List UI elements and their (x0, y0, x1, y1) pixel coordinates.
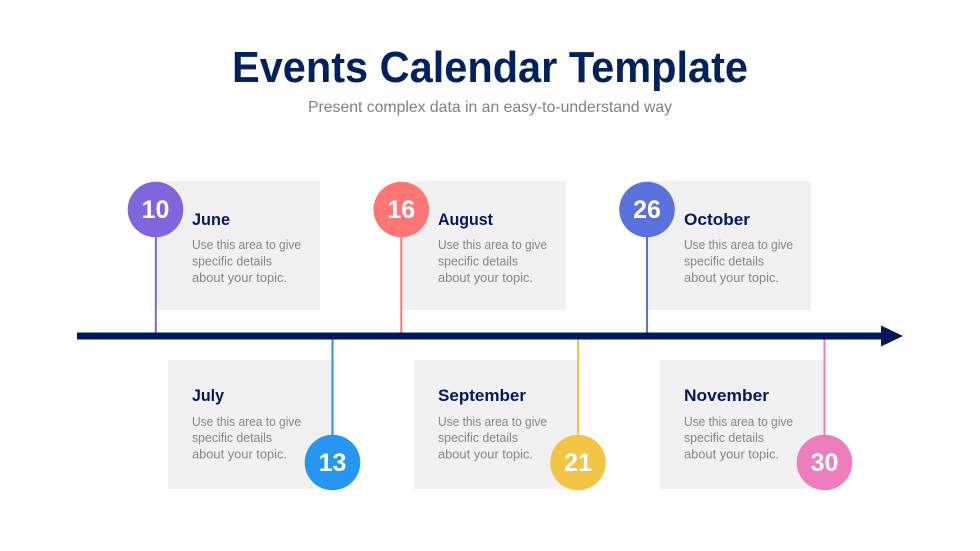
marker: November 30 (797, 338, 852, 490)
panel: October card: specific details (684, 254, 764, 268)
marker: June 10 (128, 182, 183, 334)
marker: August 16 (374, 182, 429, 334)
panel: June card: June (192, 210, 230, 229)
panel: September card: September (438, 386, 526, 405)
panel: July card: about your topic. (192, 448, 287, 462)
panel: September card: about your topic. (438, 448, 533, 462)
arrow: timeline axis (77, 326, 903, 346)
panel: June card (156, 181, 320, 310)
marker: September 21 (550, 338, 606, 490)
panel: August card: August (438, 210, 493, 229)
title: Events Calendar Template (232, 43, 748, 92)
panel: August card: specific details (438, 254, 518, 268)
panel: August card (402, 181, 566, 310)
marker: November 30: 30 (811, 449, 838, 477)
panel: October card: October (684, 210, 750, 229)
panel: July card: Use this area to give (192, 415, 301, 429)
panel: November card: specific details (684, 431, 764, 445)
panel: June card: Use this area to give (192, 238, 301, 252)
marker: July 13: 13 (319, 449, 346, 477)
panel: September card (414, 360, 578, 489)
marker: August 16: 16 (387, 196, 415, 224)
panel: July card: July (192, 386, 224, 405)
panel: September card: Use this area to give (438, 415, 547, 429)
panel: August card: about your topic. (438, 271, 533, 285)
panel: August card: Use this area to give (438, 238, 547, 252)
panel: November card (660, 360, 824, 489)
marker: June 10: 10 (142, 196, 169, 224)
panel: October card: about your topic. (684, 271, 779, 285)
panel: November card: November (684, 386, 769, 405)
panel: October card: Use this area to give (684, 238, 793, 252)
marker: October 26: 26 (633, 196, 661, 224)
subtitle: Present complex data in an easy-to-understand way (308, 99, 672, 116)
panel: July card: specific details (192, 431, 272, 445)
panel: June card: specific details (192, 254, 272, 268)
panel: November card: about your topic. (684, 448, 779, 462)
panel: October card (647, 181, 811, 310)
panel: September card: specific details (438, 431, 518, 445)
panel: November card: Use this area to give (684, 415, 793, 429)
marker: October 26 (619, 182, 675, 334)
marker: September 21: 21 (564, 449, 592, 477)
panel: July card (168, 360, 332, 489)
marker: July 13 (305, 338, 360, 490)
panel: June card: about your topic. (192, 271, 287, 285)
